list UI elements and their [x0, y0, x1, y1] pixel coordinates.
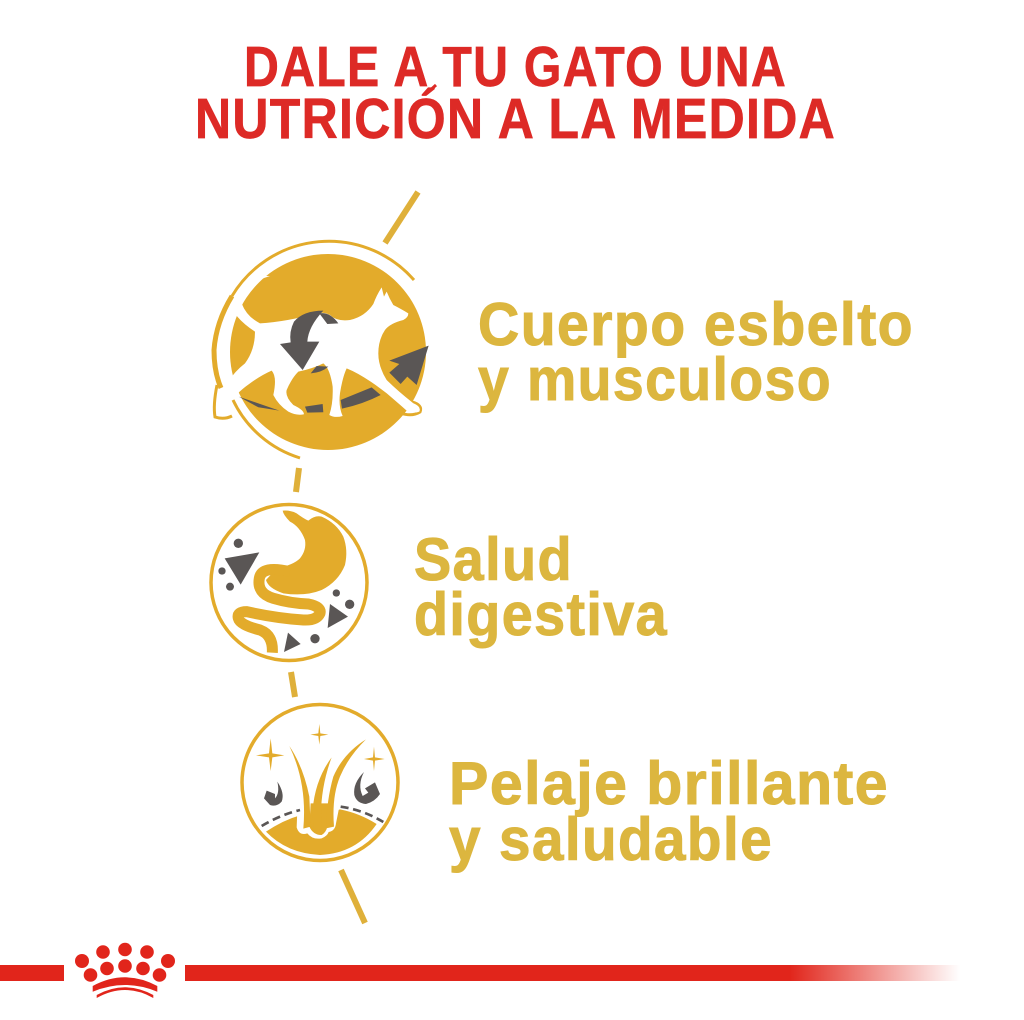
heading: salud digestiva: digestiva	[414, 581, 668, 648]
logo: crown	[75, 943, 175, 998]
heading: cuerpo esbelto y musculoso: y musculoso	[478, 346, 832, 413]
heading: cuerpo esbelto y musculoso	[478, 291, 914, 413]
connector: top	[385, 192, 418, 243]
title: DALE A TU GATO UNA	[244, 35, 787, 99]
icon: digestive system	[211, 504, 367, 660]
title	[195, 35, 836, 151]
connector: cat to stomach	[296, 468, 299, 492]
heading: cuerpo esbelto y musculoso: Cuerpo esbelto	[478, 291, 914, 358]
title: NUTRICIÓN A LA MEDIDA	[195, 87, 836, 151]
icon: shiny coat	[242, 704, 398, 860]
connector: bottom	[341, 870, 365, 923]
heading: pelaje brillante y saludable	[449, 750, 889, 873]
heading: salud digestiva	[414, 526, 668, 648]
connector: stomach to coat	[291, 672, 295, 697]
heading: salud digestiva: Salud	[414, 526, 573, 593]
icon: cat body and muscle	[214, 241, 429, 458]
heading: pelaje brillante y saludable: Pelaje brillante	[449, 750, 889, 817]
heading: pelaje brillante y saludable: y saludable	[449, 806, 773, 873]
footer bar: right	[185, 965, 960, 981]
footer bar: left	[0, 965, 64, 981]
